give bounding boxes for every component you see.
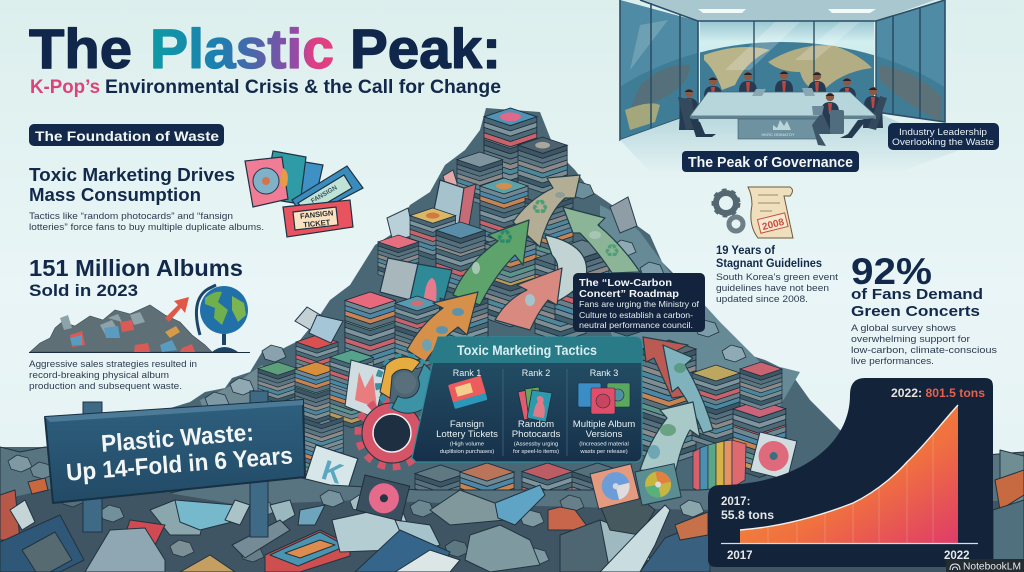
text block: toxic marketing (29, 165, 264, 233)
text block: 92 percent of fans: live performances. (851, 356, 934, 367)
album stacks (205, 108, 786, 524)
chart: plastic waste growth: 55.8 tons (721, 510, 774, 522)
icon: photocards and fansign tickets: TICKET (303, 218, 331, 229)
column: rank 3: wasts per release) (579, 449, 628, 455)
text block: 92 percent of fans: Green Concerts (851, 303, 980, 320)
text block: 19 years of stagnant guidelines: South Korea’s green event (716, 272, 838, 282)
text block: 92 percent of fans: of Fans Demand (851, 286, 983, 303)
panel: toxic marketing tactics (412, 337, 642, 462)
text block: 19 years of stagnant guidelines: updated since 2008. (716, 294, 808, 304)
illustration: rubble foreground (0, 447, 1024, 572)
column: rank 1: (High volume (450, 442, 484, 448)
title: Peak: (350, 17, 501, 80)
text block: 151 million albums (29, 255, 243, 392)
text block: 19 years of stagnant guidelines: Stagnant Guidelines (716, 258, 822, 270)
callout: the low-carbon concert roadmap: neutral performance council. (579, 320, 693, 330)
column: rank 1 (436, 368, 498, 455)
subtitle: K-Pop’s (30, 77, 100, 98)
text block: toxic marketing: Toxic Marketing Drives (29, 165, 235, 185)
sign: plastic waste up 14-fold: Up 14-Fold in 6 Years (65, 442, 294, 487)
title: Plastic (150, 17, 334, 80)
chart: plastic waste growth: 2022 (944, 550, 970, 562)
text block: 19 years of stagnant guidelines: 19 Years of (716, 245, 775, 257)
text block: toxic marketing: Tactics like “random photocards” and “fansign (29, 211, 233, 222)
column: rank 3: Multiple Album (573, 419, 635, 430)
icon: recycling arrows: ♻ (604, 241, 620, 261)
text block: 92 percent of fans: 92% (851, 251, 932, 292)
column: rank 3: Versions (586, 429, 623, 440)
column: rank 2: for speel-lo items) (513, 449, 559, 455)
chart: plastic waste growth: 2017 (727, 550, 753, 562)
text block: toxic marketing: Mass Consumption (29, 185, 201, 205)
callout: the low-carbon concert roadmap: The “Low-Carbon (579, 277, 672, 289)
icon: gears and 2008 scroll: 2008 (761, 217, 786, 233)
text block: 151 million albums: 151 Million Albums (29, 255, 243, 281)
column: rank 2: Photocards (512, 429, 560, 440)
column: rank 3: (Increased material (579, 442, 629, 448)
section label: the foundation of waste: The Foundation of Waste (35, 128, 219, 144)
callout: industry leadership (888, 123, 999, 150)
text block: 151 million albums: Aggressive sales strategies resulted in (29, 359, 197, 370)
section label: the foundation of waste (29, 124, 224, 146)
icon: recycling arrows: ♻ (531, 197, 549, 219)
callout: industry leadership: Overlooking the Waste (892, 137, 994, 148)
column: rank 3 (573, 368, 635, 455)
column: rank 1: duplilsion purchases) (440, 449, 494, 455)
icon: photocards and fansign tickets: FANSIGN (310, 184, 339, 205)
illustration: governance boardroom: HKRC ODINATOY (762, 132, 795, 137)
callout: the low-carbon concert roadmap: Culture to establish a carbon- (579, 310, 693, 320)
text block: 151 million albums: production and subsequent waste. (29, 381, 182, 392)
callout: the low-carbon concert roadmap (573, 273, 705, 332)
illustration: album waste pile and globe (29, 285, 250, 352)
heading: Toxic Marketing Tactics (457, 342, 597, 358)
text block: 19 years of stagnant guidelines: guidelines have not been (716, 283, 829, 293)
icon: photocards and fansign tickets (245, 151, 363, 237)
text block: 151 million albums: record-breaking physical album (29, 370, 169, 381)
column: rank 1: Rank 1 (453, 368, 481, 378)
column: rank 2: Random (518, 419, 554, 430)
icon: gears (358, 356, 435, 467)
chart area (740, 405, 958, 543)
sign: plastic waste up 14-fold (45, 391, 305, 537)
icon: gears and 2008 scroll (715, 187, 793, 238)
illustration: fan-shaped album row (693, 440, 746, 497)
icon: recycling arrows (407, 175, 713, 475)
illustration: governance boardroom (619, 0, 960, 163)
column: rank 2: (Assessby urging (514, 442, 558, 448)
illustration: CD cases in the rubble (356, 432, 797, 521)
subtitle: Environmental Crisis & the Call for Change (105, 77, 501, 98)
callout: the low-carbon concert roadmap: Concert” Roadmap (579, 288, 679, 300)
callout: industry leadership: Industry Leadership (899, 127, 987, 138)
column: rank 3: Rank 3 (590, 368, 618, 378)
chart: plastic waste growth: 2022: 801.5 tons (891, 386, 985, 400)
icon: photocards and fansign tickets: FANSIGN (300, 208, 334, 221)
text block: 92 percent of fans (851, 251, 997, 367)
title (29, 17, 501, 80)
text block: 92 percent of fans: overwhelming support for (851, 334, 970, 345)
text block: 92 percent of fans: low-carbon, climate-conscious (851, 345, 997, 356)
column: rank 1: Lottery Tickets (436, 429, 498, 440)
column: rank 2: Rank 2 (522, 368, 550, 378)
text block: 19 years of stagnant guidelines (716, 245, 838, 304)
album stacks: K (318, 454, 347, 490)
watermark: notebooklm (946, 559, 1024, 572)
callout: the low-carbon concert roadmap: Fans are urging the Ministry of (579, 299, 700, 309)
chart: plastic waste growth (708, 378, 993, 567)
sign: plastic waste up 14-fold: Plastic Waste: (100, 419, 255, 458)
text block: toxic marketing: lotteries” force fans to buy multiple duplicate albums. (29, 222, 264, 233)
column: rank 1: Fansign (450, 419, 484, 430)
text block: 92 percent of fans: A global survey shows (851, 323, 956, 334)
chart: plastic waste growth: 2017: (721, 496, 750, 508)
icon: recycling arrows: ♻ (496, 227, 514, 249)
label: the peak of governance: The Peak of Governance (688, 154, 853, 171)
title: The (29, 17, 132, 80)
text block: 151 million albums: Sold in 2023 (29, 281, 138, 300)
column: rank 2 (512, 368, 560, 455)
